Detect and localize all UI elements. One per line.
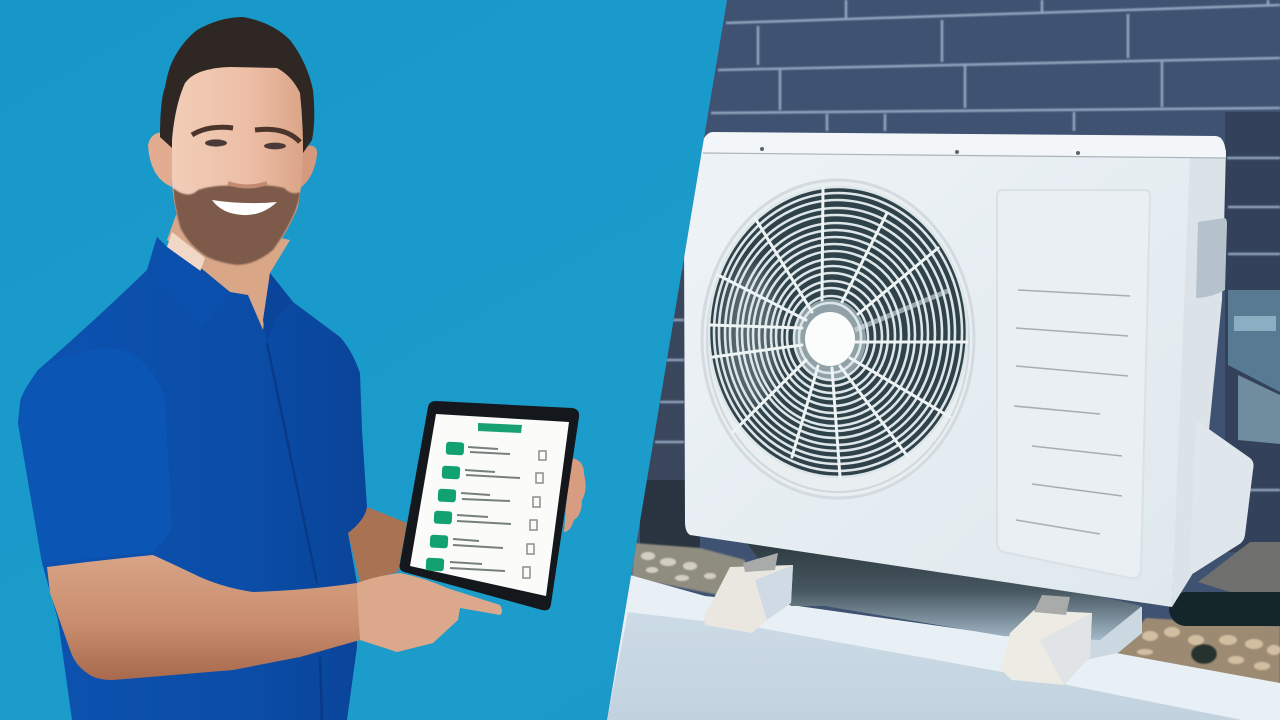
AC unit body <box>684 132 1254 607</box>
pointing hand <box>357 573 502 652</box>
blue-grey utility box <box>1228 290 1280 444</box>
fingers behind tablet <box>564 458 586 532</box>
eye right <box>264 143 286 149</box>
eye left <box>205 139 227 147</box>
list row 1 <box>446 442 546 460</box>
head and face <box>148 17 317 265</box>
shirt collar <box>147 237 230 327</box>
near arm <box>47 555 433 680</box>
top lid <box>700 132 1226 158</box>
gravel right <box>1110 618 1280 685</box>
beard <box>173 185 300 265</box>
smile <box>212 200 277 215</box>
lid screws <box>760 147 1080 155</box>
nose shadow <box>228 183 267 186</box>
glare on grille <box>855 290 950 330</box>
outer fan rim <box>702 180 974 498</box>
ear right <box>300 146 317 188</box>
concrete base <box>607 575 1280 720</box>
ear left <box>148 132 172 187</box>
right collar <box>263 273 293 343</box>
far arm <box>348 507 407 582</box>
tablet <box>400 401 579 610</box>
eyebrow left <box>192 127 233 135</box>
left-side haze <box>722 265 778 405</box>
foot right <box>1001 610 1092 685</box>
list row 4 <box>434 511 537 530</box>
recessed louvre panel <box>997 190 1150 578</box>
brick wall <box>600 0 1280 720</box>
neck <box>167 215 290 330</box>
technician <box>18 17 586 720</box>
shadowed gap under unit <box>745 540 1142 640</box>
foot left <box>704 565 793 633</box>
side valve cover <box>1190 420 1254 573</box>
list row 2 <box>442 466 543 483</box>
list row 3 <box>438 489 540 507</box>
fan grille <box>702 180 974 498</box>
guard spokes <box>710 187 967 477</box>
side panel <box>1172 150 1226 607</box>
hub surround <box>794 299 866 379</box>
lid seam <box>703 153 1226 158</box>
concentric guard rings <box>709 187 967 477</box>
grey paving <box>1198 542 1280 596</box>
front face <box>684 150 1190 607</box>
dark pipe <box>1186 592 1280 626</box>
right photo panel: AC unit scene <box>600 0 1280 720</box>
fan hub <box>805 312 855 366</box>
sleeve <box>18 348 172 563</box>
eyebrow right <box>255 129 300 142</box>
list row 6 <box>426 558 530 578</box>
louvre slots <box>1014 290 1130 534</box>
rim rings <box>706 295 970 493</box>
tablet frame <box>400 401 579 610</box>
dark fan opening <box>709 186 967 476</box>
list row 5 <box>430 535 534 554</box>
mounting feet <box>704 553 1092 685</box>
tablet screen <box>410 414 569 596</box>
side handle <box>1196 218 1227 298</box>
gravel left <box>632 543 745 600</box>
hair <box>160 17 314 153</box>
placket <box>267 343 322 720</box>
shirt torso <box>18 237 367 720</box>
neck highlight <box>167 232 205 272</box>
face <box>172 67 303 265</box>
screen header <box>478 423 522 433</box>
